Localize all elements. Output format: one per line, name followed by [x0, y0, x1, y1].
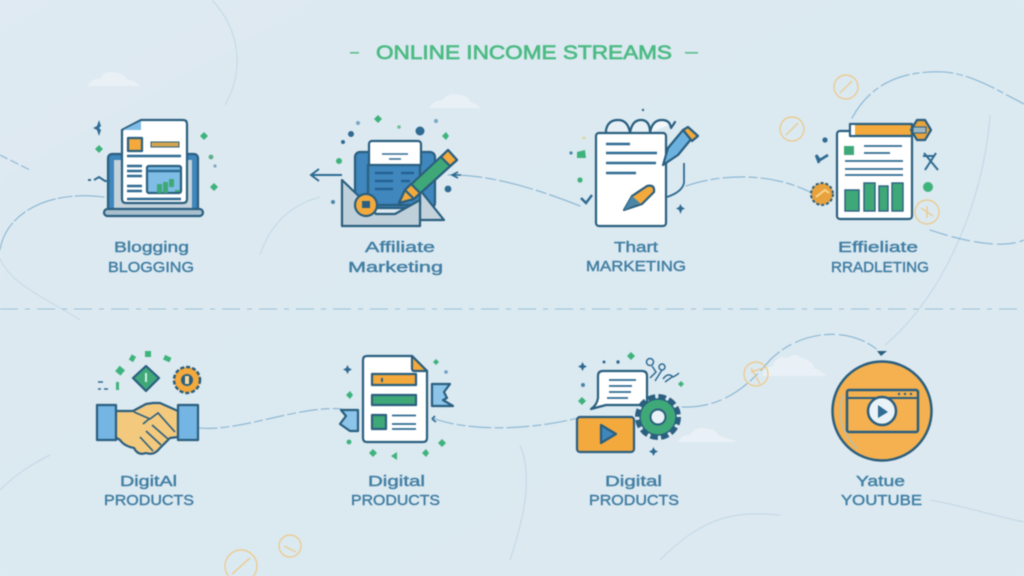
panel: effiliate marketing	[811, 120, 938, 276]
icon: video badge	[832, 362, 932, 460]
icon accents: checks and sparkles	[569, 109, 685, 214]
icon: ribbons	[340, 384, 453, 431]
panel: youtube	[832, 351, 932, 509]
icon: report with bar chart	[837, 120, 931, 219]
title: ONLINE INCOME STREAMS	[376, 43, 672, 64]
label: thart marketing: MARKETING	[586, 258, 686, 275]
label: digital products: Digital	[368, 473, 425, 490]
label: thart marketing	[586, 239, 686, 275]
icon accents: dotted arc	[98, 351, 171, 390]
label: digital products: Digital	[605, 473, 662, 490]
label: effiliate marketing: Effieliate	[838, 239, 918, 256]
icon: laptop with article	[104, 120, 203, 216]
icon: envelope and pen	[342, 141, 457, 226]
label: youtube	[841, 473, 922, 509]
icon: video player	[577, 417, 634, 452]
panel: digital products document	[340, 356, 453, 509]
label: digital products: PRODUCTS	[104, 492, 194, 509]
label: thart marketing: Thart	[614, 239, 659, 256]
label: affiliate marketing	[348, 239, 443, 276]
panel: digital products media	[577, 352, 684, 509]
icon accents: check and cross	[816, 137, 938, 192]
label: effiliate marketing: RRADLETING	[831, 259, 929, 276]
icon accents: dots	[331, 115, 461, 204]
icon: gear badge	[811, 183, 833, 205]
arrow: into youtube badge	[877, 351, 887, 356]
label: effiliate marketing	[831, 239, 929, 276]
label: digital products: DigitAl	[120, 473, 177, 490]
icon: gear	[638, 397, 678, 437]
background clouds	[88, 72, 826, 442]
icon: diamond and gear coin	[133, 366, 200, 393]
icon accents: sparkles	[88, 120, 218, 191]
label: digital products: PRODUCTS	[589, 492, 679, 509]
panel: affiliate marketing	[311, 115, 461, 276]
label: digital products: PRODUCTS	[351, 492, 440, 509]
icon accents: sparkles	[343, 359, 448, 460]
icon: notepad with pencil and pen	[596, 120, 698, 226]
icon: speech lines	[607, 380, 636, 398]
icon: document	[363, 356, 427, 442]
panel: thart marketing	[569, 109, 698, 275]
section divider	[0, 308, 1024, 310]
decorative orange badges	[225, 75, 939, 576]
arrow: left	[311, 169, 342, 181]
icon: handshake	[97, 403, 198, 454]
label: affiliate marketing: Marketing	[348, 259, 443, 276]
label: blogging: BLOGGING	[108, 259, 194, 276]
icon accents: circuit and sparkles	[578, 352, 684, 456]
label: blogging	[108, 239, 194, 276]
icon: speech bubble	[591, 371, 647, 409]
label: youtube: YOUTUBE	[841, 492, 922, 509]
panel: digital products handshake	[97, 351, 200, 509]
label: digital products	[589, 473, 679, 509]
label: blogging: Blogging	[114, 239, 189, 256]
label: affiliate marketing: Affiliate	[365, 239, 435, 256]
label: digital products	[351, 473, 440, 509]
label: digital products	[104, 473, 194, 509]
label: youtube: Yatue	[856, 473, 905, 490]
panel: blogging	[88, 120, 218, 276]
